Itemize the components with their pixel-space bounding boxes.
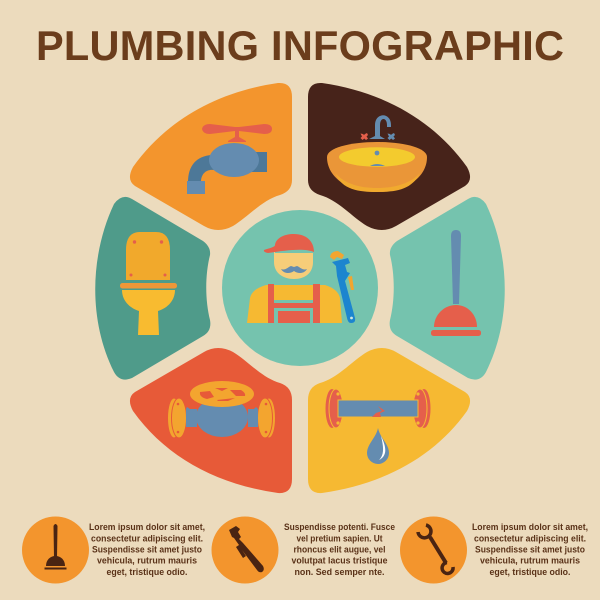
text block: right: Suspendisse sit amet justo — [475, 544, 585, 554]
text block: middle — [284, 522, 395, 577]
text block: middle: rhoncus elit augue, vel — [294, 544, 386, 554]
text block: left: consectetur adipiscing elit. — [91, 533, 203, 543]
text block: left — [89, 522, 205, 577]
panel: valve segment — [130, 348, 292, 493]
icon: washbasin — [327, 115, 427, 192]
text block: left: eget, tristique odio. — [106, 567, 188, 577]
icon: plumber — [247, 234, 355, 323]
icon badge: spanner — [400, 516, 467, 584]
panel: sink segment — [308, 83, 470, 230]
panel: faucet segment — [130, 83, 292, 230]
icon: faucet — [187, 124, 272, 194]
panel: leaking pipe segment — [308, 348, 470, 493]
icon badge: pipe wrench — [212, 516, 278, 584]
icon: plunger — [431, 230, 481, 336]
text block: right — [472, 522, 588, 577]
text block: right: vehicula, rutrum mauris — [480, 556, 580, 566]
text block: middle: Suspendisse potenti. Fusce — [284, 522, 395, 532]
text block: middle: vel pretium sapien. Ut — [296, 533, 382, 543]
text block: right: consectetur adipiscing elit. — [474, 533, 586, 543]
icon badge: plunger — [22, 516, 89, 584]
panel: plunger segment — [390, 197, 505, 380]
text block: left: vehicula, rutrum mauris — [97, 556, 197, 566]
icon: leaking pipe — [326, 389, 430, 464]
icon: valve — [168, 381, 275, 438]
text block: left: Lorem ipsum dolor sit amet, — [89, 522, 205, 532]
panel: plumber circle — [222, 210, 378, 366]
text block: middle: non. Sed semper nte. — [294, 567, 384, 577]
text block: middle: volutpat lacus tristique — [292, 556, 388, 566]
text block: right: Lorem ipsum dolor sit amet, — [472, 522, 588, 532]
title: PLUMBING INFOGRAPHIC — [36, 22, 564, 69]
icon: toilet — [120, 232, 177, 335]
panel: toilet segment — [95, 197, 210, 380]
text block: right: eget, tristique odio. — [490, 567, 570, 577]
text block: left: Suspendisse sit amet justo — [92, 544, 202, 554]
icon: pipe wrench — [330, 251, 355, 323]
